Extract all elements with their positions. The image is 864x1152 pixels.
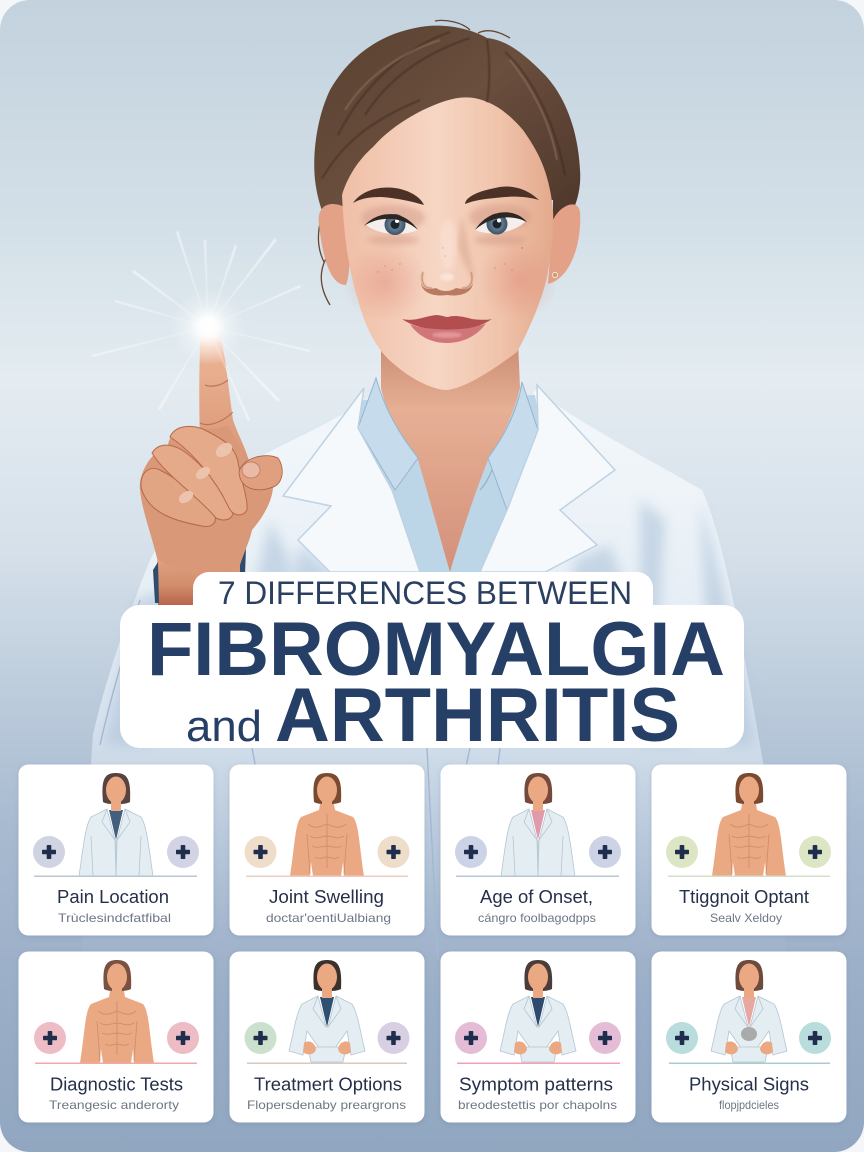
figure: [501, 773, 575, 876]
right eyebrow: [465, 186, 539, 204]
coat folds: [100, 580, 690, 960]
nose shading: [458, 215, 476, 282]
curled fingers: [141, 426, 247, 527]
label: Ttiggnoit Optant: [679, 887, 809, 907]
earring: [552, 272, 558, 278]
thumb: [239, 456, 282, 490]
label: Pain Location: [57, 887, 169, 907]
freckles: [377, 247, 523, 273]
right collar: [488, 382, 538, 510]
cheek blush: [343, 242, 427, 322]
sparkle at fingertip: [92, 231, 310, 421]
sleeve cuff: [153, 548, 246, 603]
card: Treatment Options: [230, 952, 424, 1122]
shirt: [355, 395, 545, 590]
palm: [140, 425, 273, 573]
card: Joint Swelling: [230, 764, 424, 936]
sublabel: Trùclesindcfatfibal: [58, 911, 171, 925]
hair back: [314, 26, 580, 245]
sublabel: Sealv Xeldoy: [710, 911, 782, 925]
label: Physical Signs: [689, 1074, 809, 1094]
plus icons: [666, 1022, 831, 1054]
knuckle highlights: [177, 440, 235, 506]
right eye: [475, 212, 527, 234]
label: Age of Onset,: [480, 887, 593, 907]
hair strands: [322, 32, 565, 178]
title line 3: ARTHRITIS: [275, 673, 680, 758]
card: Physical Signs: [652, 952, 846, 1122]
loose hair wisp: [318, 20, 510, 305]
sublabel: cángro foolbagodpps: [478, 911, 596, 925]
plus icons: [455, 836, 621, 868]
label: Symptom patterns: [459, 1074, 613, 1094]
label: Diagnostic Tests: [50, 1074, 183, 1094]
sublabel: doctar'oentiUalbiang: [266, 911, 391, 925]
right lapel: [480, 385, 615, 572]
figure: [712, 773, 786, 876]
left collar: [358, 378, 418, 490]
card: Pain Location: [18, 764, 214, 936]
figure: [79, 773, 153, 876]
card: Symptom Patterns: [440, 952, 636, 1122]
plus icons: [666, 836, 831, 868]
left eyebrow: [353, 188, 424, 205]
neck: [381, 340, 520, 572]
title line 2: FIBROMYALGIA: [147, 607, 725, 692]
thumbnail: [242, 462, 260, 478]
figure: [711, 960, 787, 1062]
nostrils: [421, 283, 473, 296]
pointing hand: [140, 331, 282, 605]
plus icons: [34, 1022, 199, 1054]
wrist: [157, 550, 240, 605]
title panel: main: [120, 605, 744, 748]
finger creases: [200, 380, 233, 425]
left ear: [319, 204, 350, 285]
eye shadow: [361, 204, 531, 245]
shirt placket and button: [440, 470, 492, 600]
hair and head: [314, 20, 580, 390]
title line 1: 7 DIFFERENCES BETWEEN: [218, 575, 632, 611]
right ear: [548, 204, 580, 284]
figure: [80, 960, 154, 1063]
figure: [290, 773, 364, 876]
left eye: [364, 214, 418, 235]
plus icons: [244, 1022, 410, 1054]
title: [120, 572, 744, 758]
plus icons: [33, 836, 199, 868]
face: [342, 97, 553, 390]
doctor illustration: [80, 340, 790, 1010]
card: Trigger Options: [652, 764, 846, 936]
sublabel: Treangesic anderorty: [49, 1098, 179, 1112]
card: Diagnostic Tests: [18, 952, 214, 1122]
index finger: [199, 331, 250, 465]
title and: and: [186, 702, 262, 751]
figure: [500, 960, 576, 1062]
plus icons: [244, 836, 410, 868]
plus icons: [455, 1022, 621, 1054]
left lapel: [283, 388, 420, 572]
sublabel: Flopersdenaby preargrons: [247, 1098, 406, 1112]
label: Treatmert Options: [254, 1074, 402, 1094]
coat shading: [105, 500, 755, 745]
label: Joint Swelling: [269, 887, 384, 907]
title panel: top: [193, 572, 653, 622]
lips: [402, 315, 492, 343]
lab coat: [80, 390, 790, 1010]
card: Age of Onset: [440, 764, 636, 936]
figure: [289, 960, 365, 1062]
sublabel: flopjpdcieles: [719, 1098, 779, 1112]
sublabel: breodestettis por chapolns: [458, 1098, 617, 1112]
